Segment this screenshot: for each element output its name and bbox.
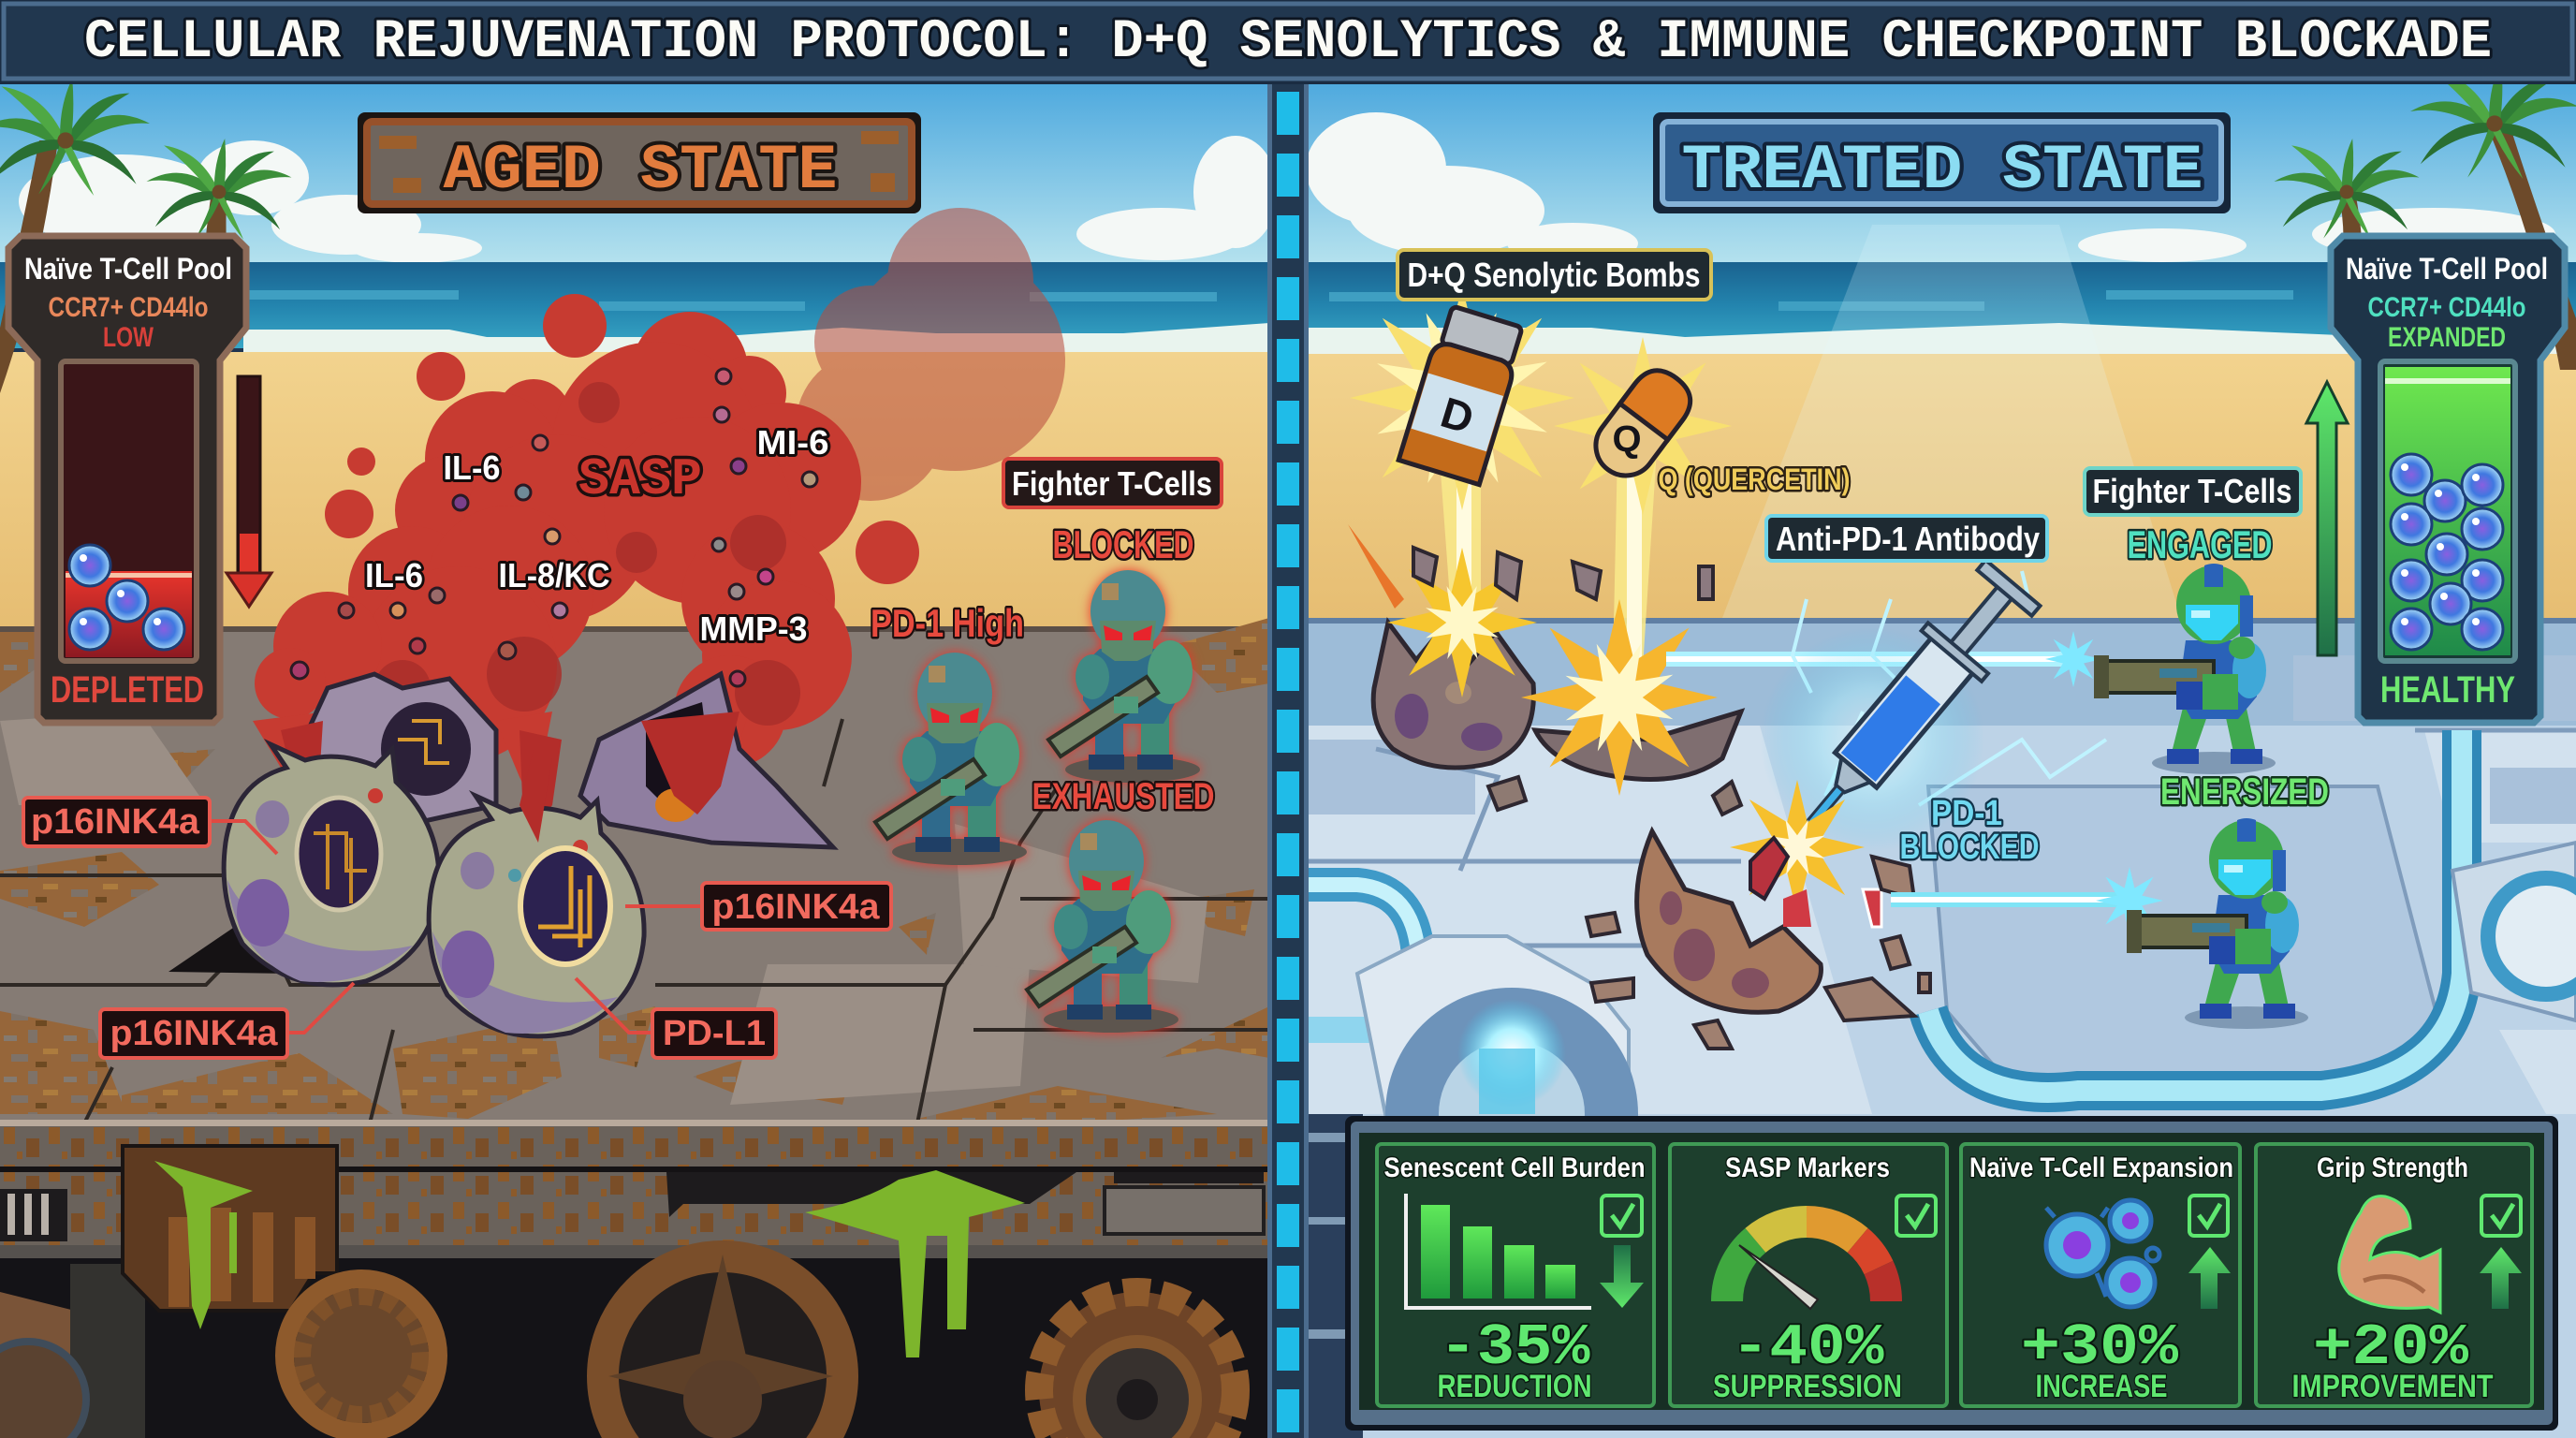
treated state sign xyxy=(1653,112,2231,213)
card: naive T-cell expansion: INCREASE xyxy=(2035,1369,2168,1404)
callout: p16INK4a right: p16INK4a xyxy=(711,888,880,927)
callout: p16INK4a right xyxy=(625,883,891,930)
center divider xyxy=(1267,84,1309,1438)
card: naive T-cell expansion xyxy=(1961,1144,2240,1406)
title bar: CELLULAR REJUVENATION PROTOCOL: D+Q SENOLYTICS & IMMUNE CHECKPOINT BLOCKADE xyxy=(84,12,2492,73)
arrow: pool expanding xyxy=(2306,382,2348,655)
fractured cell with antibody xyxy=(1587,780,1930,1049)
beam: lower fighter xyxy=(1891,867,2163,934)
status: PD-1 blocked: PD-1 xyxy=(1931,794,2002,833)
destroyed cell and explosion 1 xyxy=(1348,524,1713,768)
naive T-cell pool gauge depleted: CCR7+ CD44lo xyxy=(49,292,208,323)
card: SASP markers: -40% xyxy=(1732,1314,1884,1381)
senescent cell with nucleus 1 xyxy=(224,744,439,985)
naive T-cell pool gauge healthy xyxy=(2331,236,2565,723)
SASP cytokine labels: MI-6 xyxy=(756,423,829,462)
D+Q senolytic bombs label: D+Q Senolytic Bombs xyxy=(1408,256,1700,294)
fighter T-cells label left xyxy=(1003,459,1222,507)
icon: Q capsule xyxy=(1554,337,1732,515)
icon: D bottle xyxy=(1342,278,1582,518)
palm trees right xyxy=(2275,62,2576,370)
energized fighter T-cells xyxy=(2094,564,2308,1029)
SASP toxic cloud xyxy=(253,208,1065,805)
aged state sign: AGED STATE xyxy=(444,135,837,207)
icon: Q capsule: Q xyxy=(1612,418,1642,460)
status: engaged: ENGAGED xyxy=(2127,522,2273,566)
panel: outcome metrics xyxy=(1345,1116,2558,1431)
card: senescent cell burden: Senescent Cell Burden xyxy=(1383,1152,1646,1183)
anti-PD-1 antibody label: Anti-PD-1 Antibody xyxy=(1776,520,2040,558)
exhausted fighter T-cells xyxy=(875,570,1200,1033)
card: SASP markers: SUPPRESSION xyxy=(1713,1369,1902,1404)
callout: PD-L1: PD-L1 xyxy=(663,1014,766,1053)
card: grip strength xyxy=(2256,1144,2532,1406)
icon: D bottle: D xyxy=(1435,388,1479,443)
arrow: pool declining xyxy=(227,376,271,607)
ruptured background cells xyxy=(281,674,833,847)
aged state sign xyxy=(358,112,921,213)
naive T-cell pool gauge depleted: Naïve T-Cell Pool xyxy=(24,252,232,286)
naive T-cell pool gauge healthy: CCR7+ CD44lo xyxy=(2368,292,2525,323)
callout: PD-L1 xyxy=(576,978,776,1058)
beam: upper fighter xyxy=(1666,631,2101,687)
card: SASP markers: SASP Markers xyxy=(1725,1152,1890,1183)
status: PD-1 blocked xyxy=(1900,794,2039,867)
card: grip strength: Grip Strength xyxy=(2317,1152,2468,1183)
D+Q senolytic bombs label xyxy=(1398,250,1711,300)
card: senescent cell burden: -35% xyxy=(1440,1314,1590,1381)
SASP cytokine labels: MMP-3 xyxy=(700,609,807,648)
palm trees left xyxy=(0,79,292,393)
fighter T-cells label left: Fighter T-Cells xyxy=(1012,464,1212,503)
status: energised: ENERSIZED xyxy=(2160,771,2329,813)
destroyed cell and explosion 2 xyxy=(1488,599,1741,814)
callout: p16INK4a left: p16INK4a xyxy=(31,802,200,842)
SASP cytokine labels xyxy=(365,423,829,648)
left scene background xyxy=(0,82,1278,1438)
naive T-cell pool gauge healthy: HEALTHY xyxy=(2380,669,2515,711)
rusted machinery and gears xyxy=(0,1146,1236,1438)
fighter T-cells label right: Fighter T-Cells xyxy=(2093,472,2291,510)
callout: p16INK4a bottom: p16INK4a xyxy=(110,1014,278,1053)
card: SASP markers xyxy=(1670,1144,1947,1406)
SASP cytokine labels: IL-8/KC xyxy=(498,556,610,594)
status: PD-1 blocked: BLOCKED xyxy=(1900,828,2039,867)
callout: p16INK4a bottom xyxy=(100,983,354,1058)
status: blocked: BLOCKED xyxy=(1052,522,1194,566)
treated state sign: TREATED STATE xyxy=(1681,135,2203,207)
SASP cytokine labels: IL-6 xyxy=(444,448,500,487)
naive T-cell pool gauge depleted xyxy=(8,236,246,723)
card: grip strength: IMPROVEMENT xyxy=(2291,1369,2494,1404)
status: PD-1 high: PD-1 High xyxy=(871,601,1024,645)
naive T-cell pool gauge healthy: EXPANDED xyxy=(2388,322,2506,353)
naive T-cell pool gauge depleted: LOW xyxy=(103,322,154,353)
card: naive T-cell expansion: +30% xyxy=(2021,1314,2179,1381)
Q quercetin label: Q (QUERCETIN) xyxy=(1659,462,1850,496)
callout: p16INK4a left xyxy=(23,798,277,854)
green slime drips xyxy=(154,1161,1025,1357)
naive T-cell pool gauge depleted: DEPLETED xyxy=(51,669,204,711)
title bar xyxy=(0,0,2576,84)
senescent cell with nucleus 2 xyxy=(429,749,644,1036)
card: naive T-cell expansion: Naïve T-Cell Expansion xyxy=(1969,1152,2233,1183)
card: senescent cell burden xyxy=(1377,1144,1654,1406)
SASP cytokine labels: SASP xyxy=(578,449,702,509)
bomb beams xyxy=(1440,449,1657,712)
syringe with lightning xyxy=(1760,558,2106,863)
status: exhausted: EXHAUSTED xyxy=(1032,776,1215,817)
right scene background xyxy=(1306,82,2576,1438)
SASP cytokine labels: IL-6 xyxy=(365,556,423,594)
card: senescent cell burden: REDUCTION xyxy=(1438,1369,1591,1404)
card: grip strength: +20% xyxy=(2313,1314,2469,1381)
